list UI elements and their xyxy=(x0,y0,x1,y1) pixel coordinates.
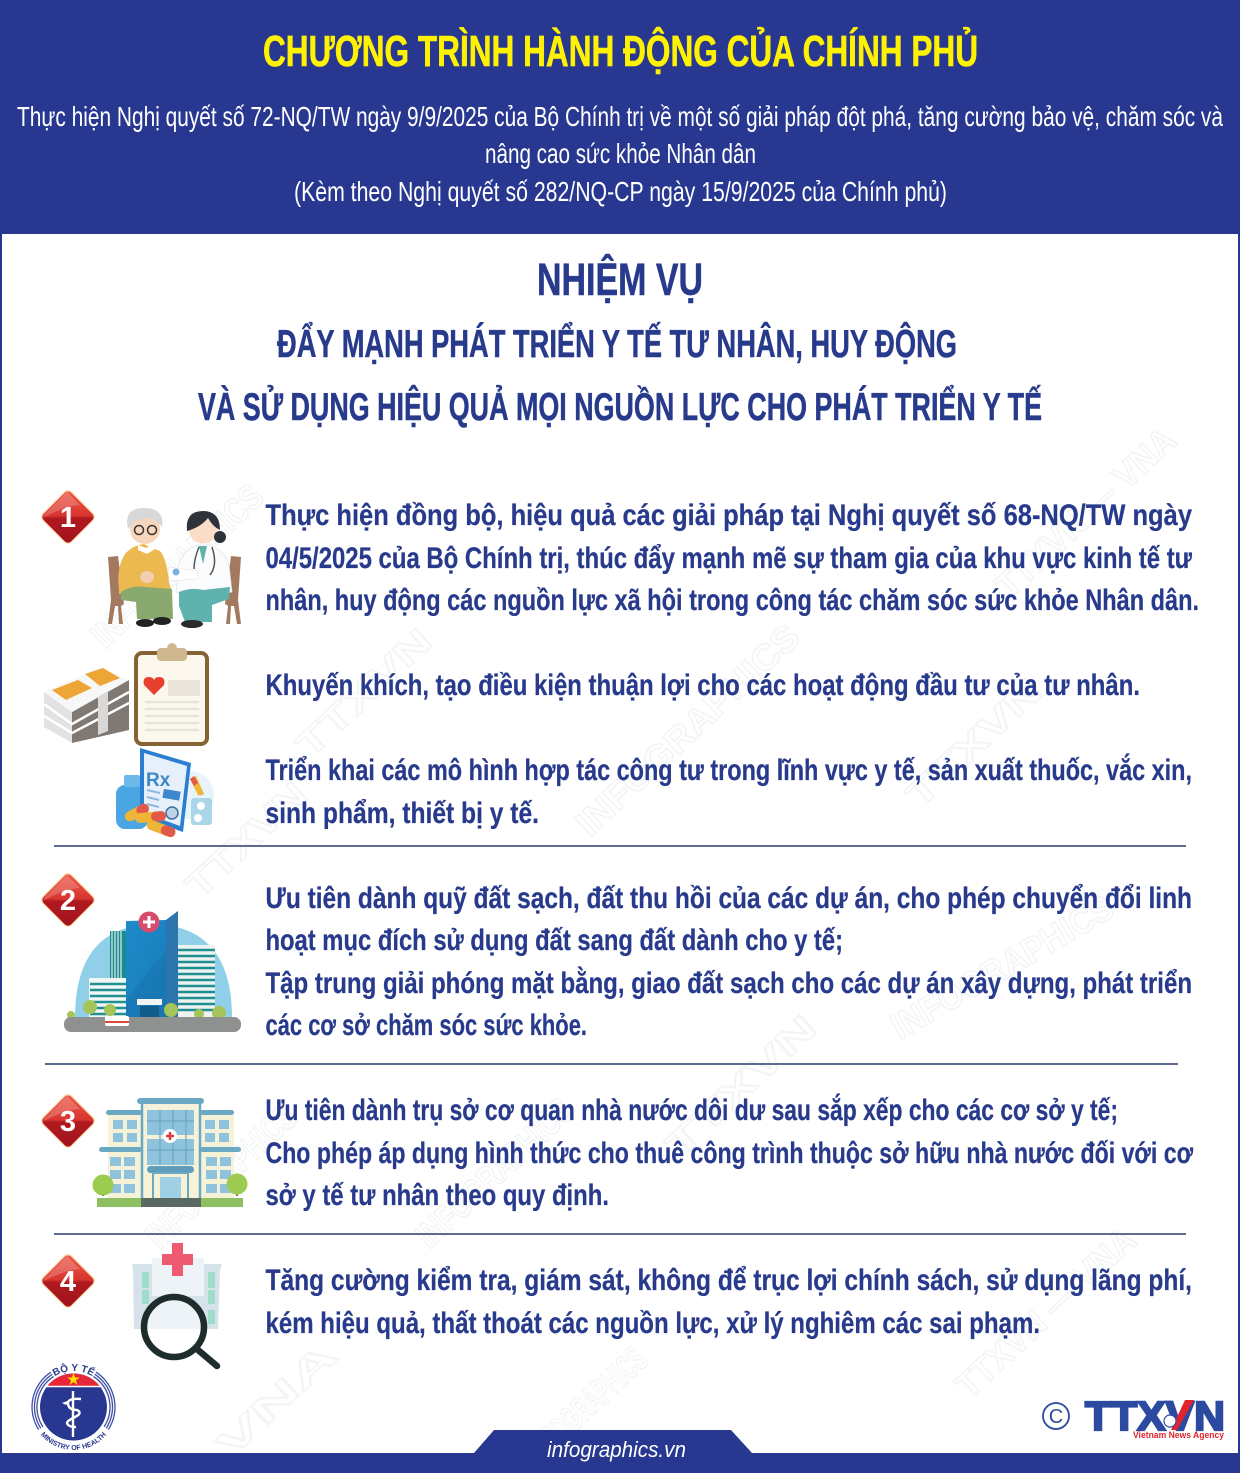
subtitle xyxy=(17,101,1224,207)
watermark: INFOGRAPHICS xyxy=(884,886,1121,1047)
text block 4 xyxy=(266,1264,1192,1340)
subtitle: (Kèm theo Nghị quyết số 282/NQ-CP ngày 15/9/2025 của Chính phủ) xyxy=(294,176,947,207)
badge 3: 3 xyxy=(60,1106,76,1138)
logo: TTXVN: TTXVN xyxy=(1085,1393,1225,1439)
badge 1 xyxy=(40,489,96,545)
watermark: TTXVN xyxy=(177,774,315,906)
title: CHƯƠNG TRÌNH HÀNH ĐỘNG CỦA CHÍNH PHỦ xyxy=(263,25,978,76)
watermark: TTXVN xyxy=(897,670,1050,816)
icon: medicine and prescription: Rx xyxy=(146,770,171,791)
badge 4: 4 xyxy=(60,1266,76,1298)
badge 4 xyxy=(40,1253,96,1309)
watermark: TTXVN xyxy=(657,1006,824,1166)
badge 2 xyxy=(40,872,96,928)
section heading: ĐẨY MẠNH PHÁT TRIỂN Y TẾ TƯ NHÂN, HUY ĐỘNG xyxy=(277,321,957,366)
badge 2: 2 xyxy=(60,885,76,917)
watermark: INFOGRAPHICS xyxy=(567,616,808,844)
text block 1: sinh phẩm, thiết bị y tế. xyxy=(266,797,539,830)
watermark: INFOGRAPHICS xyxy=(517,1339,655,1471)
watermark: TTXVN — VNA xyxy=(987,419,1184,606)
icon: inspection magnifier over clinic xyxy=(132,1243,222,1366)
text block 2 xyxy=(266,882,1192,1042)
subtitle: nâng cao sức khỏe Nhân dân xyxy=(485,138,756,169)
badge 1: 1 xyxy=(60,502,76,534)
logo: TTXVN: Vietnam News Agency xyxy=(1133,1430,1224,1440)
footer website: infographics.vn xyxy=(547,1437,686,1462)
section heading xyxy=(198,254,1042,429)
watermark: TTXVN xyxy=(287,620,440,766)
logo: TTXVN: C xyxy=(1049,1406,1063,1428)
icon: elderly patient and doctor xyxy=(108,508,241,628)
icon: money and clipboard xyxy=(44,643,207,744)
watermark: INFOGRAPHICS xyxy=(137,1096,304,1256)
clipboard xyxy=(136,643,207,744)
watermark: TTXVN — VNA xyxy=(947,1219,1144,1406)
watermark xyxy=(82,419,1184,1471)
logo: ministry of health: BỘ Y TẾ xyxy=(52,1363,96,1376)
money stack xyxy=(44,667,129,743)
icon: hospital building xyxy=(92,1098,248,1207)
logo: ministry of health xyxy=(31,1363,116,1450)
icon: hospital tower xyxy=(64,911,241,1032)
icon: medicine and prescription xyxy=(116,748,214,838)
watermark: INFOGRAPHICS xyxy=(407,1089,582,1256)
header banner xyxy=(0,0,1240,234)
text block 4: kém hiệu quả, thất thoát các nguồn lực, xử lý nghiêm các sai phạm. xyxy=(266,1307,1040,1340)
text block 3 xyxy=(266,1093,1194,1212)
logo: ministry of health: MINISTRY OF HEALTH xyxy=(41,1432,106,1450)
badge 3 xyxy=(40,1093,96,1149)
text block 1 xyxy=(266,499,1199,830)
footer bar xyxy=(0,1430,1240,1473)
text block 2: các cơ sở chăm sóc sức khỏe. xyxy=(266,1009,587,1042)
text block 2: hoạt mục đích sử dụng đất sang đất dành cho y tế; xyxy=(266,924,843,957)
watermark: INFOGRAPHICS xyxy=(82,476,271,656)
text block 3: sở y tế tư nhân theo quy định. xyxy=(266,1179,609,1212)
section heading: NHIỆM VỤ xyxy=(537,254,703,305)
watermark: VNA xyxy=(207,1334,345,1466)
